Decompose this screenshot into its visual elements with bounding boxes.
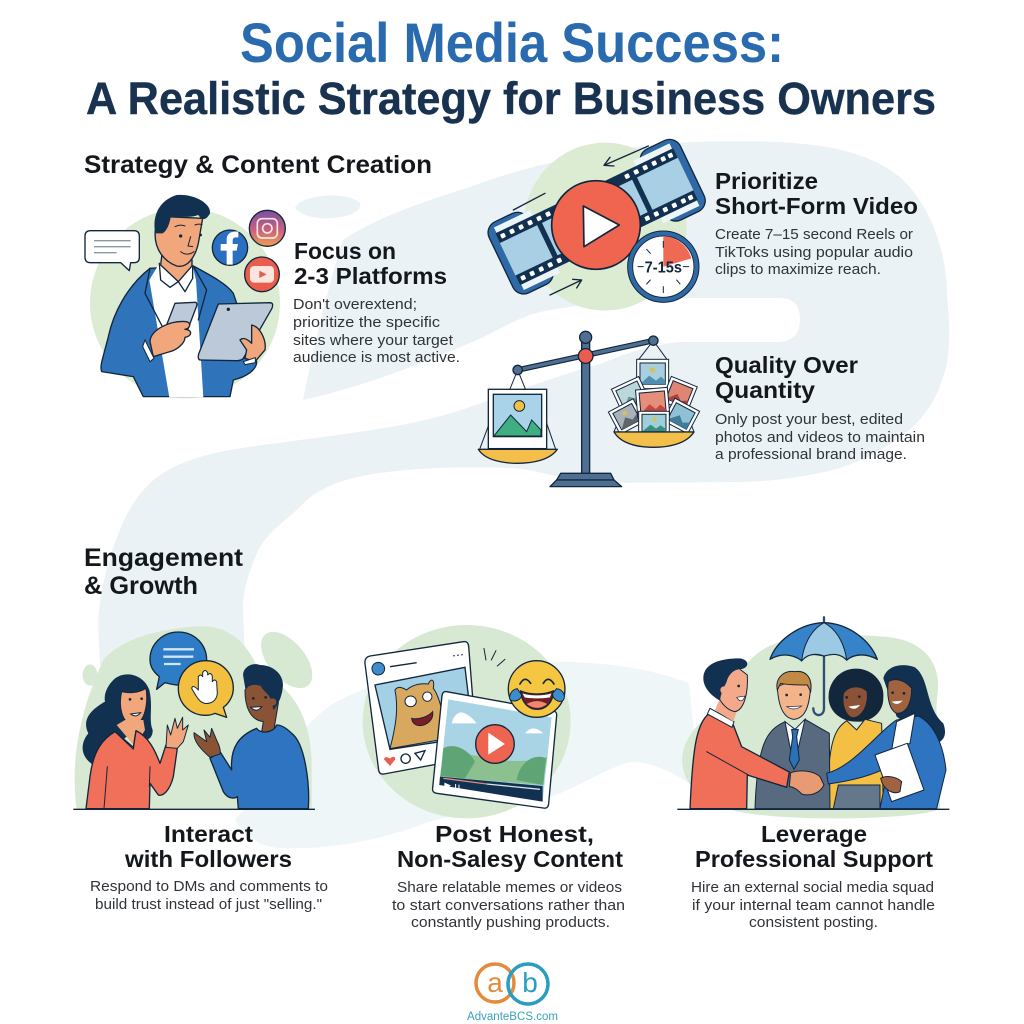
card: professional support: Professional Support bbox=[695, 846, 933, 872]
shirt bbox=[149, 263, 203, 397]
arrow: top bbox=[604, 146, 648, 166]
illustration: business man with social platforms bbox=[85, 195, 285, 398]
card: honest content: constantly pushing products. bbox=[411, 914, 610, 931]
logo: a bbox=[487, 967, 503, 998]
card: short-form video: Short-Form Video bbox=[715, 193, 918, 219]
card: honest content: Share relatable memes or videos bbox=[397, 879, 622, 896]
woman in blue jacket bbox=[827, 665, 946, 809]
ground line bbox=[73, 807, 315, 811]
card: interact with followers: Respond to DMs and comments to bbox=[90, 878, 328, 895]
woman in yellow bbox=[827, 669, 883, 809]
instagram icon bbox=[249, 210, 285, 246]
card: quality over quantity bbox=[715, 352, 925, 463]
heading: strategy and content creation: Strategy & Content Creation bbox=[84, 151, 432, 179]
card: short-form video: Create 7–15 second Reels or bbox=[715, 226, 913, 243]
blue speech bubble bbox=[150, 632, 207, 689]
timer bbox=[628, 231, 699, 302]
card: interact with followers: with Followers bbox=[124, 846, 292, 872]
title bbox=[86, 11, 936, 124]
jacket bbox=[101, 266, 257, 397]
card: quality over quantity: Only post your best, edited bbox=[715, 411, 903, 428]
reaction icons bbox=[384, 757, 395, 766]
video card bbox=[433, 692, 557, 808]
card: professional support: if your internal team cannot handle bbox=[692, 897, 935, 914]
right hand bbox=[240, 325, 265, 362]
arrow: bottom bbox=[550, 279, 582, 295]
card: interact with followers bbox=[90, 821, 328, 913]
hair bbox=[154, 195, 210, 233]
title: Social Media Success: bbox=[240, 11, 784, 74]
card: honest content: Post Honest, bbox=[435, 821, 594, 847]
card: short-form video bbox=[715, 168, 918, 278]
left pan bbox=[478, 449, 557, 463]
card: focus on platforms: prioritize the specific bbox=[293, 314, 441, 331]
film strip bbox=[484, 135, 709, 298]
card: quality over quantity: Quantity bbox=[715, 377, 815, 403]
yellow speech bubble with hand bbox=[178, 661, 233, 717]
card: interact with followers: build trust instead of just "selling." bbox=[95, 896, 322, 913]
card: focus on platforms: Focus on bbox=[294, 238, 396, 264]
card: honest content: to start conversations rather than bbox=[392, 897, 625, 914]
title: A Realistic Strategy for Business Owners bbox=[86, 73, 936, 124]
man bbox=[194, 664, 309, 809]
logo: AdvanteBCS.com bbox=[467, 1011, 558, 1023]
card: focus on platforms: sites where your target bbox=[293, 332, 454, 349]
timer: 7-15s bbox=[645, 260, 682, 277]
base bbox=[550, 473, 622, 487]
card: focus on platforms bbox=[293, 238, 460, 366]
card: focus on platforms: 2-3 Platforms bbox=[294, 263, 447, 289]
illustration: professional support team bbox=[677, 617, 949, 818]
speech bubble bbox=[85, 231, 139, 271]
spark lines bbox=[484, 648, 505, 666]
heading: engagement and growth: Engagement bbox=[84, 544, 244, 572]
logo: b bbox=[522, 967, 538, 998]
card: focus on platforms: Don't overextend; bbox=[293, 296, 417, 313]
card: short-form video: clips to maximize reach. bbox=[715, 261, 881, 278]
heading: engagement and growth: & Growth bbox=[84, 572, 198, 600]
bear bbox=[390, 680, 448, 749]
pile of photos bbox=[608, 359, 700, 434]
card: professional support: Leverage bbox=[761, 821, 867, 847]
illustration: memes and video cards bbox=[363, 625, 571, 818]
umbrella bbox=[770, 617, 877, 715]
handshake bbox=[789, 771, 824, 795]
woman bbox=[83, 674, 188, 809]
card: quality over quantity: Quality Over bbox=[715, 352, 858, 378]
pole bbox=[582, 338, 590, 475]
tablet bbox=[198, 303, 273, 361]
heading: engagement and growth bbox=[84, 544, 244, 600]
card: professional support: Hire an external social media squad bbox=[691, 879, 934, 896]
youtube icon bbox=[245, 257, 279, 292]
card: quality over quantity: a professional brand image. bbox=[715, 446, 907, 463]
left pan picture bbox=[488, 389, 547, 449]
card: quality over quantity: photos and videos to maintain bbox=[715, 429, 925, 446]
right pan bbox=[614, 432, 694, 447]
beam bbox=[518, 341, 653, 370]
post card bbox=[365, 642, 477, 774]
left hand bbox=[150, 321, 191, 357]
illustration: film strip with timer and scale bbox=[478, 135, 709, 487]
phone bbox=[166, 302, 197, 331]
right hanger bbox=[614, 341, 694, 432]
card: professional support: consistent posting. bbox=[749, 914, 878, 931]
arrow: left stroke bbox=[513, 193, 545, 210]
laughing emoji bbox=[508, 661, 565, 717]
left hanger bbox=[480, 370, 555, 448]
head bbox=[155, 217, 203, 266]
card: short-form video: Prioritize bbox=[715, 168, 818, 194]
card: short-form video: TikToks using popular audio bbox=[715, 244, 913, 261]
neck bbox=[161, 248, 192, 282]
card: professional support bbox=[691, 821, 935, 931]
man in coral jacket bbox=[690, 658, 789, 809]
balance scale bbox=[478, 331, 700, 487]
ground line bbox=[677, 807, 949, 811]
man in grey suit bbox=[755, 671, 830, 809]
card: honest content bbox=[392, 821, 625, 931]
card: focus on platforms: audience is most active. bbox=[293, 349, 460, 366]
illustration: two people interacting bbox=[73, 623, 322, 809]
card: honest content: Non-Salesy Content bbox=[397, 846, 623, 872]
logo bbox=[467, 964, 558, 1023]
speech bubble lines bbox=[94, 241, 131, 253]
background ribbon bbox=[98, 141, 949, 848]
card: interact with followers: Interact bbox=[164, 821, 253, 847]
play button bbox=[552, 181, 640, 269]
facebook icon bbox=[212, 230, 248, 265]
